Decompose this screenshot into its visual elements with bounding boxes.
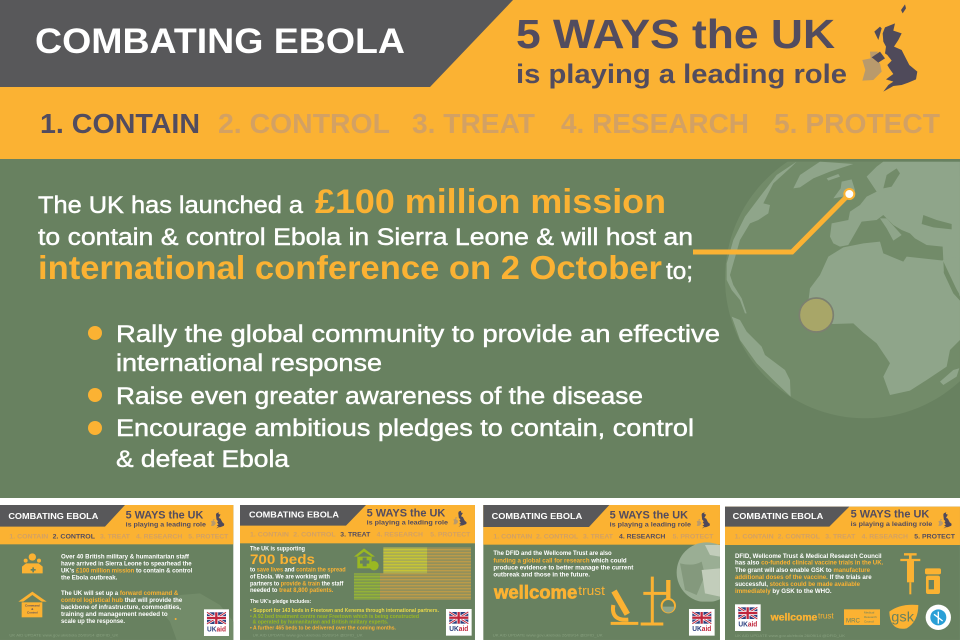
panel: thumbnail 4 research: 1. CONTAIN — [493, 533, 533, 540]
body text: to save lives and contain the spread — [250, 566, 346, 573]
panel: thumbnail 2 control: 2. CONTROL — [53, 533, 95, 540]
step navigation: 5. PROTECT — [774, 108, 940, 139]
icon: lab flask and stand — [641, 577, 675, 624]
logo: MRC: MRC — [846, 618, 861, 624]
bullet list: & defeat Ebola — [116, 446, 290, 473]
body text: produce evidence to better manage the current — [493, 564, 634, 571]
south america — [732, 317, 791, 397]
body text — [493, 550, 634, 579]
panel: thumbnail 5 protect: UK AID UPDATE www.gov.uk/ebola 26/09/14 @DFID_UK — [735, 633, 845, 638]
body text: outbreak and those in the future. — [493, 572, 590, 579]
body text — [250, 545, 439, 631]
intro text: to; — [666, 258, 693, 285]
body text: backbone of infrastructure, commodities, — [61, 604, 181, 611]
panel: thumbnail 3 treat: COMBATING EBOLA — [249, 510, 339, 520]
panel: thumbnail 5 protect: 2. CONTROL — [778, 533, 820, 540]
intro text — [38, 183, 693, 286]
bullet list: Encourage ambitious pledges to contain, control — [116, 415, 694, 442]
body text: • Support for 143 beds in Freetown and Kenema through international partners. — [250, 608, 439, 614]
logo: wellcome trust — [770, 611, 834, 623]
panel: thumbnail 5 protect: 4. RESEARCH — [862, 533, 908, 540]
logo: wellcome trust: trust — [578, 583, 605, 598]
panel: thumbnail 2 control: 3. TREAT — [100, 533, 130, 540]
logo: UK aid: UKaid — [449, 624, 469, 633]
panel: thumbnail 3 treat: 3. TREAT — [340, 532, 370, 539]
subtitle: 5 ways: 5 WAYS the UK — [516, 11, 835, 57]
body text: The grant will also enable GSK to manufacture — [735, 567, 870, 574]
bullet list: international response — [116, 350, 382, 377]
body text: have arrived in Sierra Leone to spearhead the — [61, 560, 192, 567]
panel: thumbnail 4 research: 4. RESEARCH — [619, 533, 666, 540]
logo: UK aid — [446, 609, 472, 636]
logo: GSK: gsk — [891, 609, 915, 625]
panel: thumbnail 4 research — [483, 505, 737, 640]
panel: thumbnail 4 research: is playing a leading role — [610, 521, 691, 528]
panel: thumbnail 4 research: COMBATING EBOLA — [492, 511, 582, 521]
logo: UK aid: UKaid — [207, 624, 226, 633]
step navigation: 3. TREAT — [412, 108, 535, 139]
logo: UK aid: UKaid — [692, 624, 712, 633]
map: west africa — [160, 593, 233, 640]
body text: has also co-funded clinical vaccine trials in the UK. — [735, 560, 884, 567]
body text: DFID, Wellcome Trust & Medical Research Council — [735, 553, 882, 560]
panel: thumbnail 5 protect: COMBATING EBOLA — [733, 511, 823, 521]
panel: thumbnail 3 treat: is playing a leading role — [367, 520, 448, 527]
bed grid chart — [354, 547, 471, 600]
icon: command and control hub: Command — [25, 603, 40, 607]
body text: successful, stocks could be made available — [735, 581, 860, 588]
icon: microscope — [611, 591, 638, 623]
panel: main green background — [0, 159, 960, 498]
step navigation: 2. CONTROL — [218, 108, 390, 139]
body text — [61, 553, 193, 625]
body text: The UK's pledge includes: — [250, 599, 312, 605]
logo: wellcome trust: wellcome — [770, 612, 818, 623]
body text: The UK will set up a forward command & — [61, 590, 179, 597]
logo: MRC — [844, 609, 880, 625]
panel: thumbnail 4 research: 3. TREAT — [583, 533, 613, 540]
body text: funding a global call for research which could — [493, 557, 627, 564]
panel: thumbnail 3 treat: 2. CONTROL — [293, 532, 336, 539]
logo: GSK — [889, 605, 918, 629]
panel: thumbnail 5 protect — [725, 507, 960, 640]
body text: • A 92 bed treatment centre near Freetown which is being constructed — [250, 614, 419, 620]
intro text: international conference on 2 October — [38, 249, 662, 286]
logo: UK aid — [735, 604, 761, 631]
panel: thumbnail 5 protect: 5. PROTECT — [914, 533, 955, 540]
body text: The UK is supporting — [250, 545, 305, 552]
panel: thumbnail 2 control: 5. PROTECT — [188, 533, 228, 540]
body text: & operated by humanitarian and British military experts. — [253, 619, 389, 625]
panel: thumbnail 3 treat: 5 WAYS the UK — [367, 508, 446, 520]
bullet list — [88, 321, 720, 473]
header band — [0, 0, 960, 159]
panel: thumbnail 2 control: UK AID UPDATE www.gov.uk/ebola 26/09/14 @DFID_UK — [9, 632, 119, 637]
logo: MRC: Medical — [864, 611, 875, 615]
panel: thumbnail 5 protect: 3. TREAT — [825, 533, 855, 540]
bullet list: Rally the global community to provide an effective — [116, 321, 720, 348]
body text: needed to treat 8,800 patients. — [250, 587, 334, 594]
icon: syringe — [900, 554, 920, 594]
logo: wellcome trust: wellcome — [493, 581, 577, 602]
panel: thumbnail 2 control: 5 WAYS the UK — [126, 509, 204, 521]
logo: MRC: Research — [864, 615, 877, 619]
logo: UK aid — [689, 609, 715, 636]
connector arrow to UK — [693, 194, 849, 252]
panel: thumbnail 2 control: is playing a leading role — [126, 521, 206, 528]
body text: • A further 465 beds to be delivered over the coming months. — [250, 625, 396, 631]
panel: thumbnail 4 research: 5 WAYS the UK — [610, 509, 688, 521]
logo: MRC: Council — [864, 619, 874, 623]
bullet list: Raise even greater awareness of the disease — [116, 383, 643, 410]
panel: thumbnail 4 research: 5. PROTECT — [673, 533, 713, 540]
UK — [833, 179, 855, 200]
intro text: to contain & control Ebola in Sierra Leone & will host an — [38, 224, 693, 251]
icon: UK map — [862, 4, 917, 92]
body text: 700 beds — [250, 551, 315, 567]
panel: thumbnail 2 control — [0, 505, 233, 640]
body text: partners to provide & train the staff — [250, 580, 344, 587]
panel: thumbnail 4 research: UK AID UPDATE www.gov.uk/ebola 26/09/14 @DFID_UK — [493, 632, 603, 637]
UK marker — [844, 189, 854, 199]
logo: UK aid — [204, 609, 229, 636]
body text: scale up the response. — [61, 618, 125, 625]
panel: thumbnail 3 treat — [240, 505, 475, 640]
panel: thumbnail 2 control: 1. CONTAIN — [9, 533, 49, 540]
logo: WHO — [926, 605, 951, 630]
body text: The DFID and the Wellcome Trust are also — [493, 550, 612, 557]
body text: control logistical hub that will provide the — [61, 597, 183, 604]
icon: command and control hub: & — [31, 607, 34, 611]
ebola region marker — [799, 298, 833, 332]
body text: training and management needed to — [61, 611, 168, 618]
panel: thumbnail 3 treat: 4. RESEARCH — [377, 532, 423, 539]
body text — [735, 553, 884, 595]
globe — [676, 542, 720, 602]
north america — [727, 162, 797, 313]
globe — [693, 138, 960, 418]
body text: additional doses of the vaccine. If the trials are — [735, 574, 872, 581]
panel: thumbnail 3 treat: UK AID UPDATE www.gov.uk/ebola 26/09/14 @DFID_UK — [253, 632, 363, 637]
step navigation: 1. CONTAIN — [40, 108, 200, 139]
icon: staff group — [22, 553, 43, 573]
panel: thumbnail 4 research: 2. CONTROL — [536, 533, 578, 540]
body text: the Ebola outbreak. — [61, 574, 118, 581]
panel: thumbnail 2 control: 4. RESEARCH — [136, 533, 183, 540]
logo: UK aid: UKaid — [738, 619, 758, 628]
body text: UK's £100 million mission to contain & control — [61, 567, 193, 574]
body text: of Ebola. We are working with — [250, 573, 330, 580]
subtitle: leading role: is playing a leading role — [516, 59, 847, 89]
panel: thumbnail 2 control: COMBATING EBOLA — [8, 511, 98, 521]
icon: command and control hub — [18, 592, 47, 617]
body text: immediately by GSK to the WHO. — [735, 588, 832, 595]
icon: hospital — [354, 548, 379, 570]
panel: thumbnail 5 protect: is playing a leading role — [851, 521, 933, 528]
intro text: The UK has launched a — [38, 192, 304, 219]
logo: wellcome trust: trust — [818, 611, 834, 620]
body text: Over 40 British military & humanitarian staff — [61, 553, 190, 560]
icon: command and control hub: Control — [27, 611, 38, 615]
step navigation: 4. RESEARCH — [561, 108, 749, 139]
intro text: £100 million mission — [315, 183, 666, 221]
eurasia — [830, 162, 960, 260]
panel: thumbnail 3 treat: 5. PROTECT — [430, 532, 470, 539]
icon: vaccine bottle — [925, 568, 941, 594]
panel: thumbnail 5 protect: 5 WAYS the UK — [851, 509, 930, 521]
africa — [807, 242, 960, 395]
step navigation — [40, 108, 940, 139]
panel: thumbnail 5 protect: 1. CONTAIN — [735, 533, 774, 540]
panel: thumbnail 3 treat: 1. CONTAIN — [250, 532, 289, 539]
title: COMBATING EBOLA — [35, 22, 405, 61]
